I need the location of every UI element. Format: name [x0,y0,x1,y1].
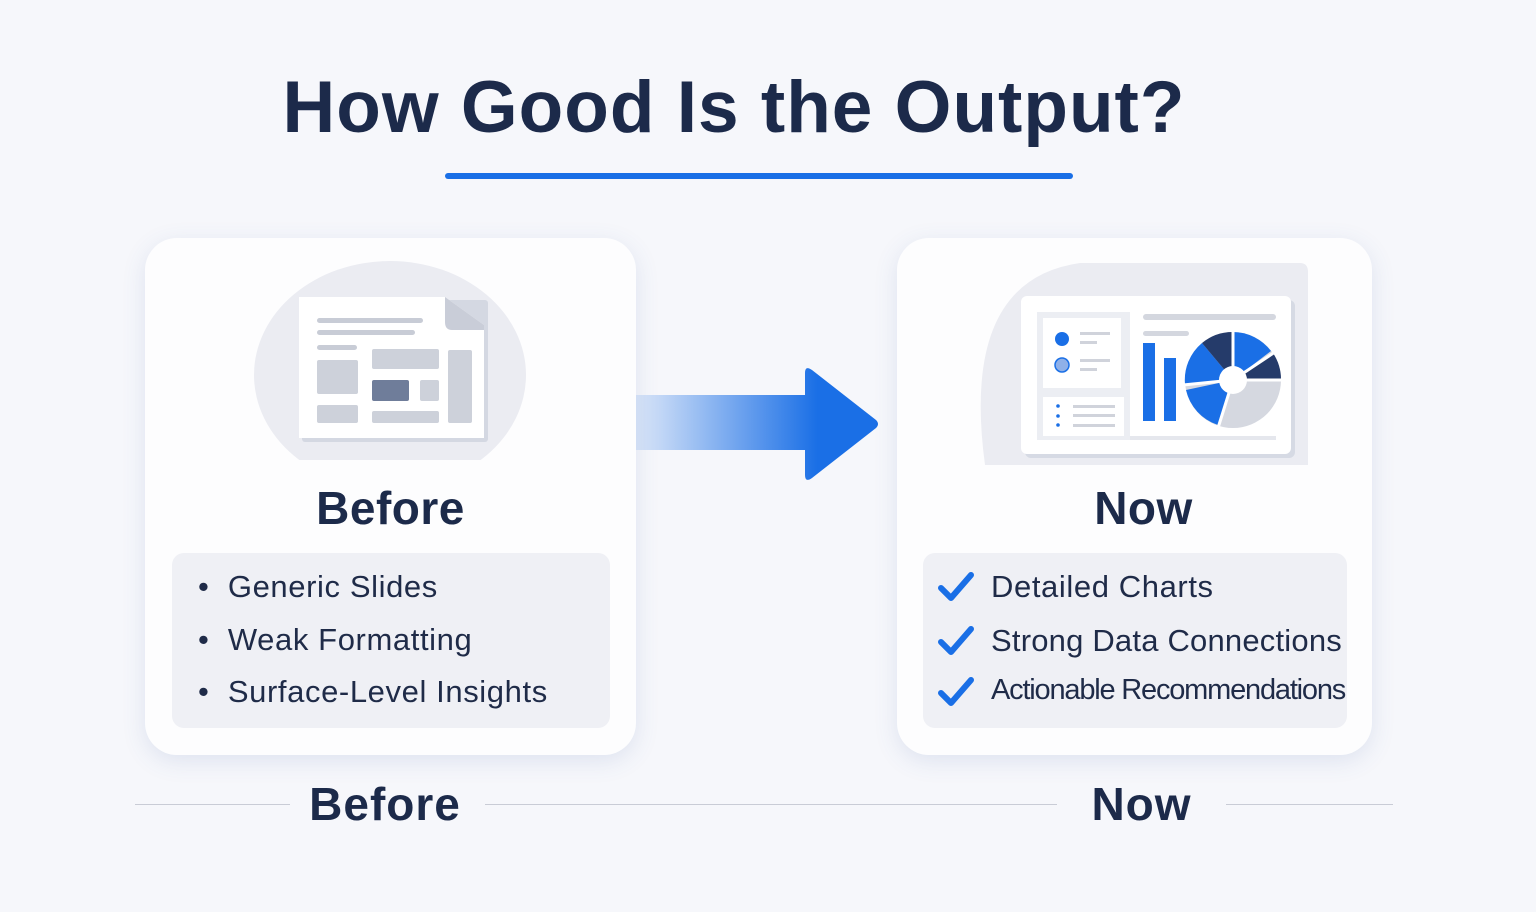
arrow [636,368,878,480]
list: now items [923,553,1347,728]
label: Before: Before [309,778,461,830]
list: before items [172,553,610,728]
item: • Generic Slides [198,569,438,604]
heading: Now: Now [1094,482,1193,534]
timeline [135,778,1393,830]
item: • Surface-Level Insights [198,674,548,709]
heading: Before: Before [316,482,465,534]
title: How Good Is the Output? [283,67,1185,148]
title underline [445,173,1073,179]
item: • Weak Formatting [198,622,472,657]
icon: dashboard [980,263,1308,465]
item: Actionable Recommendations [991,674,1345,706]
icon: document [254,261,526,460]
label: Now: Now [1091,778,1192,830]
panel: before [145,238,636,755]
panel: now [897,238,1372,755]
item: Detailed Charts [991,569,1214,604]
item: Strong Data Connections [991,623,1342,658]
